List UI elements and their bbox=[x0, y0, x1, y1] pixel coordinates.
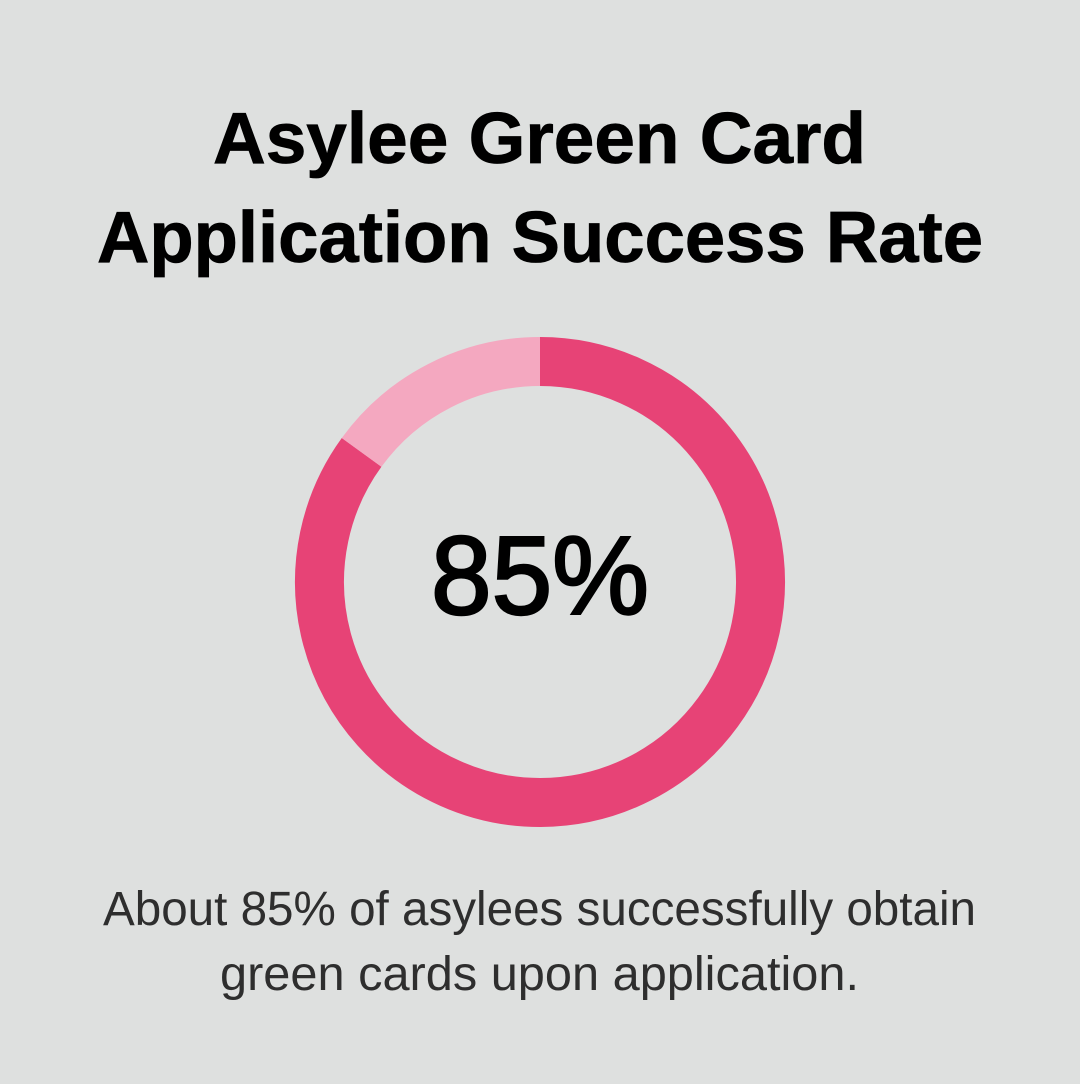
description text bbox=[103, 883, 976, 1001]
donut segment: 85% bbox=[319, 362, 760, 802]
description text: green cards upon application. bbox=[220, 948, 859, 1001]
title bbox=[97, 99, 983, 278]
donut segment: remaining 15% bbox=[362, 362, 540, 452]
donut chart: 85% success rate bbox=[319, 362, 760, 802]
title: Asylee Green Card bbox=[213, 99, 866, 179]
center value: 85% bbox=[431, 514, 649, 638]
description text: About 85% of asylees successfully obtain bbox=[103, 883, 976, 936]
title: Application Success Rate bbox=[97, 198, 983, 278]
